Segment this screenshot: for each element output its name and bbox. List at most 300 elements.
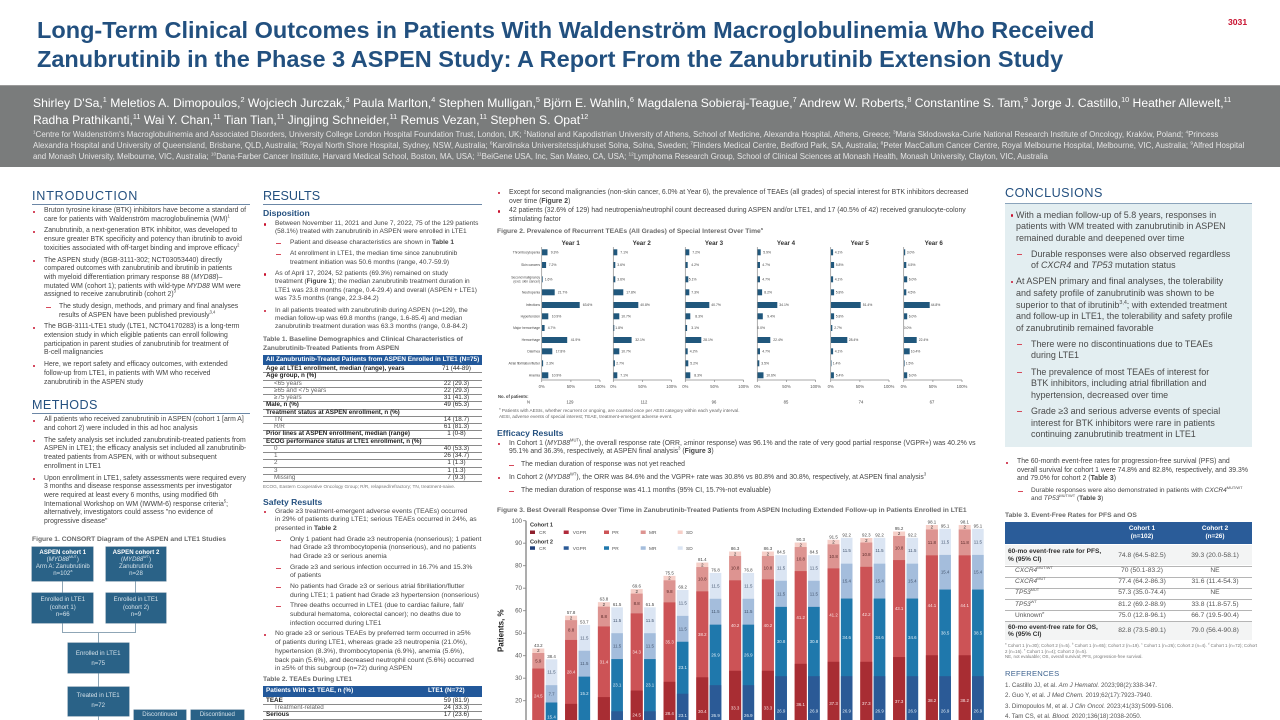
y axis: 90 — [515, 540, 523, 547]
segment labels cohort 1 PR and dark: 38.2 — [960, 698, 970, 703]
table 1 header — [263, 355, 482, 365]
panel: year 6: Year 6 — [925, 240, 943, 247]
segment labels cohort 2 SD and MR: 11.5 — [679, 600, 687, 606]
panel: year 4: 34.1% — [779, 303, 789, 307]
text: safety sub-bullet 3 — [290, 583, 479, 599]
segment labels cohort 2 PR and dark: 23.1 — [678, 713, 688, 718]
row labels: Atrial fibrillation/flutter — [508, 362, 541, 366]
box: ASPEN cohort 2: (MYD88WT) — [121, 555, 151, 563]
text: methods bullet 3: progressive disease" — [44, 518, 107, 525]
total labels: 98.1 — [928, 520, 937, 524]
caption: table 1: Table 1. Baseline Demographics and Clinical Characteristics of — [263, 336, 463, 343]
panel: year 6: 0.0% — [904, 326, 911, 330]
panel: year 2: 0% — [610, 384, 617, 389]
segment labels cohort 2 PR and dark: 26.9 — [875, 708, 884, 714]
table 1 rows: Age group, n (%) — [266, 372, 316, 379]
table 1 rows: Prior lines at ASPEN enrollment, median (range) — [266, 430, 410, 437]
text: methods bullet 3: International Workshop on WM (IWWM-6) response criteria5; — [44, 498, 228, 508]
table 2 header: Patients With ≥1 TEAE, n (%) — [266, 687, 353, 694]
table 1 rows: TN — [274, 416, 282, 423]
text: survival sub-bullet: Durable responses were also demonstrated in patients with CXCR4MUT/WT — [1031, 485, 1242, 494]
text: intro bullet 5 — [44, 360, 228, 386]
panel: year 4: Year 4 — [777, 240, 796, 247]
table 1 rows: 26 (34.7) — [444, 452, 469, 459]
text: methods bullet 2: enrollment in LTE1 — [44, 463, 101, 470]
text: conclusion 2 sub-bullet 2: BTK inhibitors, including atrial fibrillation and — [1031, 378, 1206, 388]
table 2: TEAEs during LTE1: TEAE — [266, 697, 283, 704]
authors — [33, 95, 1231, 127]
cohort 1 column header: Cohort 1 — [1129, 525, 1155, 532]
table 2 header: LTE1 (N=72) — [428, 687, 465, 694]
table 3: event-free rates: Unknowne — [1015, 610, 1044, 619]
table 1: baseline demographics — [263, 336, 482, 365]
box: enrolled cohort 1 — [32, 593, 93, 623]
text: intro bullet 4 — [44, 322, 239, 356]
text: efficacy bullet 1: In Cohort 1 (MYD88MUT), the overall response rate (ORR, ≥minor response) was 96.1% and the rate of very good partial response (VGPR+) was 40.2% vs — [509, 437, 976, 447]
stable disease count labels: 2 — [635, 589, 638, 594]
text: efficacy sub-bullet 1: The median duration of response was not yet reached — [521, 461, 685, 468]
box: treated in LTE1: Treated in LTE1 — [77, 692, 120, 699]
panel: year 4: 50% — [782, 384, 791, 389]
text: methods bullet 2: The safety analysis set included zanubrutinib-treated patients from — [44, 437, 246, 444]
text: disposition sub-bullet 2 — [290, 250, 457, 266]
affiliations — [33, 130, 1244, 161]
panel: year 4 — [754, 240, 821, 389]
segment labels cohort 1 PR and dark: 37.3 — [862, 701, 871, 706]
text: disposition bullet 3: median follow-up was 69.8 months (range, 1.6-85.4) and median — [275, 315, 462, 322]
segment labels cohort 1 PR and dark: 34.3 — [632, 650, 642, 654]
text: safety bullet 2: hypertension (8.3%), thrombocytopenia (6.9%), anemia (5.6%), — [275, 648, 464, 655]
panel: year 3: 100% — [738, 384, 749, 389]
row labels: Neutropenia — [522, 290, 540, 294]
text: survival summary — [1005, 458, 1252, 505]
panel: year 1: 10.9% — [552, 374, 561, 378]
panel: year 2 — [610, 240, 677, 389]
title: Zanubrutinib in the Phase 3 ASPEN Study: A Report From the Zanubrutinib Extension Study — [37, 46, 1063, 72]
y axis: 50 — [515, 630, 523, 637]
segment labels cohort 2 SD and MR: 11.5 — [908, 548, 917, 553]
title: Long-Term Clinical Outcomes in Patients With Waldenström Macroglobulinemia Who Received — [37, 17, 1094, 43]
table 1 rows: 22 (29.3) — [444, 380, 469, 386]
total labels: 38.4 — [547, 654, 556, 659]
table 1 rows: 1 (0-8) — [447, 430, 466, 437]
segment labels cohort 1 PR and dark: 38.2 — [698, 632, 707, 637]
segment labels cohort 1 PR and dark: 37.3 — [829, 701, 838, 706]
panel: efficacy results — [497, 428, 976, 494]
stable disease count labels: 2 — [767, 551, 770, 556]
text: methods bullet 3: were required at least every 6 months, using modified 6th — [44, 492, 218, 499]
y axis: 20 — [515, 698, 523, 705]
number of patients row: 74 — [859, 399, 864, 404]
panel: year 5: 2.7% — [834, 326, 842, 330]
affiliations: and Monash University, Melbourne, VIC, Australia; 10Dana-Farber Cancer Institute, Harvard Medical School, Boston, MA, USA; 11BeiGene USA, Inc, San Mateo, CA, USA; 12Lymphoma Research Group, School of Clinical Sciences at Monash Health, Monash University, Clayton, VIC, Australia — [33, 152, 1048, 161]
table 1 rows: R/R — [274, 423, 285, 430]
panel: year 1: 100% — [595, 384, 606, 389]
panel: year 1: 17.8% — [556, 350, 565, 354]
table 1 rows: 1 (1.3) — [447, 466, 466, 474]
panel: year 1: 4.7% — [548, 326, 555, 330]
segment labels cohort 1 MR: 10.8 — [829, 554, 838, 559]
panel: year 2: 2.7% — [616, 362, 624, 366]
table 3: event-free rates: CXCR4MUT — [1015, 576, 1046, 585]
segment labels cohort 2 PR and dark: 26.9 — [744, 652, 753, 657]
cohort 2 bars — [546, 529, 984, 720]
box: enrolled cohort 1: (cohort 1) — [50, 604, 76, 611]
cohort 2 column header — [1185, 525, 1245, 542]
text: methods bullet 3: Upon enrollment in LTE1, safety assessments were required every — [44, 475, 246, 482]
text: intro bullet 5: Here, we report safety and efficacy outcomes, with extended — [44, 361, 228, 368]
panel: year 6: 0% — [901, 384, 907, 389]
total labels: 61.5 — [646, 602, 655, 607]
conclusions background — [1005, 202, 1252, 447]
segment labels cohort 2 SD and MR: 11.5 — [613, 618, 622, 623]
panel: safety results — [263, 497, 482, 672]
segment labels cohort 2 PR and dark: 26.9 — [711, 652, 720, 657]
row labels: (excl. skin cancer) — [513, 280, 540, 284]
reference list: 4. Tam CS, et al. Blood. 2020;136(18):2038-2050. — [1005, 713, 1141, 720]
table 1 rows: 0 — [274, 445, 278, 452]
panel: year 2: 7.1% — [620, 374, 628, 378]
segment labels cohort 2 PR and dark: 34.6 — [842, 635, 852, 640]
panel: results — [263, 189, 482, 330]
panel: year 5: 5.4% — [836, 374, 843, 378]
segment labels cohort 1 PR and dark: 31.4 — [600, 659, 609, 664]
panel: year 1: 7.2% — [549, 263, 556, 267]
table 1 rows: ≥65 and <75 years — [274, 387, 326, 394]
total labels: 92.2 — [875, 532, 884, 537]
row labels — [1008, 548, 1108, 565]
panel: year 3: 8.3% — [694, 374, 702, 378]
text: disposition sub-bullet 1: Patient and disease characteristics are shown in Table 1 — [290, 239, 454, 246]
text: top bullet 2: stimulating factor — [509, 216, 561, 223]
panel: year 6: 1.5% — [906, 362, 913, 366]
segment labels cohort 2 PR and dark: 26.9 — [941, 708, 950, 714]
reference list: 3. Dimopoulos M, et al. J Clin Oncol. 2023;41(33):5099-5106. — [1005, 703, 1173, 710]
text: safety bullet 2: of patients during LTE1, whereas grade ≥3 neutropenia (21.0%), — [275, 639, 467, 646]
text: safety bullet 1 — [275, 508, 477, 532]
panel: references — [1005, 666, 1252, 720]
row labels — [508, 250, 541, 378]
panel: year 5: 5.8% — [836, 314, 843, 318]
row labels: Second malignancy — [511, 276, 540, 280]
panel: year 3: 28.1% — [703, 338, 713, 342]
segment labels cohort 2 SD and MR — [547, 539, 983, 696]
text: safety sub-bullet 3: No patients had Grade ≥3 or serious atrial fibrillation/flutter — [290, 583, 464, 590]
text: conclusion 1: With a median follow-up of 5.8 years, responses in — [1016, 210, 1216, 220]
reference list — [1005, 681, 1173, 720]
number of patients row: 129 — [566, 399, 574, 404]
text: safety sub-bullet 4: Three deaths occurred in LTE1 (due to cardiac failure, fall/ — [290, 602, 464, 609]
affiliations: Alexandra Hospital and University of Queensland, Brisbane, QLD, Australia; 5Royal North Shore Hospital, Sydney, NSW, Australia; 6Karolinska Universitetssjukhuset Solna, Solna, Sweden; 7Flinders Medical Centre, Bedford Park, SA, Australia; 8Peter MacCallum Cancer Centre, Royal Melbourne Hospital, Melbourne, VIC, Australia; 9Alfred Hospital — [33, 141, 1244, 150]
panel: year 5 — [828, 240, 895, 389]
segment labels cohort 2 PR and dark: 34.6 — [875, 635, 884, 640]
box: ASPEN cohort 1 — [32, 547, 93, 581]
cohort 1 values: 57.3 (35.0-74.4) — [1118, 589, 1166, 596]
panel: year 5: 28.4% — [849, 338, 858, 342]
text: disposition bullet 2: As of April 17, 2024, 52 patients (69.3%) remained on study — [275, 270, 448, 277]
total labels: 76.8 — [711, 567, 720, 572]
table 3 footnotes: 2 (n=16). e Cohort 1 (n=4); Cohort 2 (n=5). — [1005, 648, 1087, 654]
text: top bullet 1 — [509, 188, 968, 205]
panel: year 4: 3.5% — [761, 362, 769, 366]
box: discontinued 2 — [191, 710, 244, 720]
segment labels cohort 1 MR: 11.8 — [928, 540, 937, 545]
segment labels cohort 2 SD and MR: 11.5 — [843, 548, 851, 553]
segment labels cohort 2 SD and MR: 15.4 — [842, 579, 852, 584]
row labels: Infections — [526, 303, 540, 307]
text: safety bullet 2: back pain (5.6%), and decreased neutrophil count (5.6%) occurred — [275, 656, 474, 664]
box: discontinued 2: Discontinued — [200, 711, 235, 718]
row labels: Hemorrhage — [522, 338, 540, 342]
row labels: Thrombocytopenia — [513, 250, 540, 254]
box: enrolled cohort 2: Enrolled in LTE1 — [114, 596, 158, 603]
heading: introduction: INTRODUCTION — [32, 189, 138, 203]
caption: figure 1: Figure 1. CONSORT Diagram of the ASPEN and LTE1 Studies — [32, 536, 226, 543]
stable disease count labels: 2 — [734, 551, 737, 556]
legend — [530, 523, 693, 552]
stable disease count labels: 2 — [570, 615, 573, 620]
panel: year 6: 6.0% — [909, 278, 916, 282]
cohort 2 column header: Cohort 2 — [1202, 525, 1228, 532]
text: disposition bullet 2 — [275, 270, 477, 302]
row labels: Diarrhea — [527, 350, 540, 354]
text: intro bullet 5: follow-up from LTE1, in patients with WM who received — [44, 370, 210, 377]
text: conclusion 2 — [1016, 276, 1232, 334]
authors: Radha Prathikanti,11 Wai Y. Chan,11 Tian Tian,11 Jingjing Schneider,11 Remus Vezan,11 Stephen S. Opat12 — [33, 112, 588, 127]
number of patients row: 96 — [712, 399, 717, 404]
box: enrolled cohort 1: Enrolled in LTE1 — [40, 596, 85, 603]
text: safety sub-bullet 1: had Grade ≥3 or serious anemia — [290, 553, 387, 560]
segment labels cohort 2 PR and dark: 23.1 — [613, 683, 622, 688]
segment labels cohort 1 MR: 8.8 — [634, 601, 640, 606]
box: treated in LTE1: n=72 — [91, 702, 105, 709]
text: top bullet 2 — [509, 206, 966, 223]
cohort 2 values: NE — [1210, 589, 1220, 596]
legend: PR — [612, 530, 619, 536]
table 3: event-free rates — [1005, 512, 1252, 642]
segment labels cohort 2 SD and MR: 11.5 — [711, 583, 720, 588]
row labels: % (95% CI) — [1008, 556, 1041, 563]
total labels: 63.8 — [600, 597, 609, 602]
box: enrolled cohort 2: (cohort 2) — [123, 604, 149, 611]
box: ASPEN cohort 2: ASPEN cohort 2 — [113, 549, 159, 556]
box: enrolled in LTE1: n=75 — [91, 660, 105, 666]
segment labels cohort 2 PR and dark: 23.1 — [646, 683, 655, 688]
segment labels cohort 1 PR and dark: 24.5 — [632, 712, 642, 718]
table 3 footnotes: a Cohort 1 (n=30); Cohort 2 (n=5). b Cohort 1 (n=65); Cohort 2 (n=19). c Cohort 1 (n=26); Cohort 2 (n=4). d Cohort 1 (n=72); Cohort — [1005, 643, 1257, 648]
panel: year 5: 1.4% — [833, 362, 840, 366]
cohort 1 bars — [532, 525, 971, 720]
text: disposition bullet 1 — [275, 220, 478, 235]
segment labels cohort 2 SD and MR: 11.5 — [941, 539, 950, 544]
text: disposition bullet 3 — [275, 306, 468, 330]
text: top bullet 1: Except for second malignancies (non-skin cancer, 6.0% at Year 6), the prevalence of TEAEs (all grades) of special interest for BTK inhibitors decreased — [509, 189, 968, 196]
text: safety bullet 2: No grade ≥3 or serious TEAEs by preferred term occurred in ≥5% — [275, 630, 471, 637]
text: intro sub-bullet: results of ASPEN have been published previously3,4 — [59, 309, 215, 319]
segment labels cohort 2 PR and dark: 15.2 — [580, 691, 589, 696]
total labels: 69.2 — [678, 584, 688, 590]
table 1 rows: 2 — [274, 459, 278, 466]
cohort 1 values: 75.0 (12.8-96.1) — [1118, 612, 1166, 619]
text: intro sub-bullet: The study design, methods, and primary and final analyses — [59, 303, 238, 310]
row labels: Hypertension — [521, 314, 540, 318]
panel: year 1: 41.9% — [571, 338, 580, 342]
panel: year 4: 4.7% — [762, 263, 770, 267]
text: intro bullet 3 — [44, 256, 241, 298]
text: intro bullet 3: The ASPEN study (BGB-3111-302; NCT03053440) directly — [44, 257, 222, 264]
table 1 rows: Treatment status at ASPEN enrollment, n (%) — [266, 408, 400, 416]
segment labels cohort 2 PR and dark: 26.9 — [842, 708, 852, 714]
text: disposition sub-bullet 2: treatment initiation was 50.6 months (range, 40.7-59.9) — [290, 259, 449, 266]
table 2: TEAEs during LTE1: 59 (81.9) — [444, 697, 469, 704]
segment labels cohort 2 PR and dark: 30.8 — [777, 639, 786, 644]
panel: year 3: 40.7% — [711, 303, 721, 307]
table 3: event-free rates: 60-mo event-free rate for OS, — [1008, 624, 1098, 630]
panel: year 3: 8.3% — [695, 314, 703, 318]
legend: SD — [686, 546, 693, 552]
text: methods bullet 1: and cohort 2) were included in this ad hoc analysis — [44, 425, 198, 432]
caption: table 2: Table 2. TEAEs During LTE1 — [263, 676, 352, 683]
cohort 1 values: 70 (50.1-83.2) — [1121, 567, 1163, 574]
panel: year 2: Year 2 — [633, 240, 651, 247]
text: safety sub-bullet 4: subdural hematoma, colorectal cancer); no deaths due to — [290, 611, 461, 618]
text: survival bullet — [1017, 458, 1248, 483]
segment labels cohort 1 PR and dark: 38.2 — [928, 698, 937, 703]
text: survival sub-bullet — [1031, 487, 1242, 503]
panel: year 3 — [682, 240, 749, 389]
text: safety sub-bullet 2 — [290, 564, 472, 579]
segment labels cohort 2 SD and MR: 11.5 — [580, 635, 589, 640]
row labels: 60-mo event-free rate for PFS, — [1008, 548, 1101, 555]
y axis: 70 — [515, 585, 523, 592]
row labels: Anemia — [529, 374, 540, 378]
panel: year 3: Year 3 — [705, 240, 724, 247]
stable disease count labels: 2 — [865, 538, 868, 543]
text: intro bullet 2 — [44, 226, 242, 252]
cohort 2 values: 79.0 (56.4-90.8) — [1191, 627, 1239, 634]
table 1 rows: ≥75 years — [274, 394, 302, 401]
table 1 rows: 3 — [274, 466, 278, 474]
cohort 1 values — [1112, 512, 1172, 637]
text: methods bullet 2: treated patients from ASPEN, with or without subsequent — [44, 454, 217, 461]
panel: year 3: 0% — [682, 384, 689, 389]
text: safety sub-bullet 2: of patients — [290, 572, 321, 579]
segment labels cohort 1 PR and dark: 44.1 — [928, 603, 937, 608]
panel: year 1: 9.3% — [551, 250, 558, 254]
text: conclusion 1: patients with WM treated with zanubrutinib in ASPEN — [1016, 221, 1226, 231]
text: safety bullet 1: in 29% of patients during LTE1; serious TEAEs occurred in 24%, as — [275, 516, 477, 523]
panel: year 4: 8.2% — [764, 290, 772, 294]
text: intro bullet 4: The BGB-3111-LTE1 study (LTE1, NCT04170283) is a long-term — [44, 323, 239, 330]
text: safety bullet 1: Grade ≥3 treatment-emergent adverse events (TEAEs) occurred — [275, 508, 467, 515]
text: disposition sub-bullet 2: At enrollment in LTE1, the median time since zanubrutinib — [290, 250, 457, 257]
segment labels cohort 1 MR: 10.8 — [764, 566, 773, 571]
total labels: 84.5 — [777, 550, 786, 555]
total labels: 84.5 — [810, 550, 819, 555]
segment labels cohort 2 SD and MR: 11.5 — [679, 626, 687, 631]
panel: year 4: 0.0% — [757, 326, 765, 330]
y axis: 30 — [515, 675, 523, 682]
box: enrolled cohort 1: n=66 — [56, 611, 70, 618]
row background PFS — [1005, 545, 1252, 565]
table 3: event-free rates: CXCR4MUT/WT — [1015, 565, 1053, 574]
box: ASPEN cohort 2: n=28 — [129, 570, 143, 577]
segment labels cohort 1 MR: 10.8 — [862, 552, 871, 557]
text: methods bullet 1: All patients who received zanubrutinib in ASPEN (cohort 1 [arm A] — [44, 416, 244, 423]
panel: year 5: 4.1% — [835, 250, 842, 254]
total labels: 92.3 — [862, 532, 871, 538]
text: top bullet 2: 42 patients (32.6% of 129) had neutropenia/neutrophil count decreased during ASPEN and/or LTE1, and 17 (40.5% of 42) received granulocyte-colony — [509, 207, 966, 214]
panel: year 5: 100% — [884, 384, 895, 389]
box: treated in LTE1 — [68, 687, 129, 716]
text: survival sub-bullet: and TP53MUT/WT (Table 3) — [1031, 493, 1103, 502]
text: efficacy sub-bullet 2: The median duration of response was 41.1 months (95% CI, 15.7%-not evaluable) — [521, 487, 771, 494]
text: intro bullet 3: with myeloid differentiation primary response 88 (MYD88)– — [44, 274, 222, 281]
legend: CR — [539, 530, 546, 536]
text: intro sub-bullet — [59, 302, 238, 319]
panel: year 2: 10.7% — [621, 350, 631, 354]
segment labels cohort 2 SD and MR: 7.7 — [548, 691, 555, 696]
legend: VGPR — [573, 530, 587, 536]
segment labels cohort 2 SD and MR: 11.5 — [974, 539, 983, 544]
table 3 header — [1005, 522, 1252, 544]
text: disposition bullet 2: was 73.5 months (range, 22.3-84.2) — [275, 295, 379, 302]
segment labels cohort 2 SD and MR: 11.5 — [711, 609, 720, 614]
cohort 2 column header: (n=26) — [1205, 533, 1224, 540]
total labels: 75.5 — [665, 570, 674, 575]
panel: year 1 — [539, 240, 606, 389]
table 3: event-free rates: TP53MUT — [1015, 587, 1039, 596]
legend: CR — [539, 546, 546, 552]
panel: year 5: 4.1% — [835, 350, 842, 354]
segment labels cohort 1 PR and dark: 40.2 — [731, 623, 740, 628]
total labels: 86.3 — [764, 546, 773, 551]
heading: conclusions: CONCLUSIONS — [1005, 186, 1103, 200]
legend: SD — [686, 530, 693, 536]
text: safety sub-bullet 1: Only 1 patient had Grade ≥3 neutropenia (nonserious); 1 patient — [290, 536, 481, 543]
cohort 2 values: 31.6 (11.4-54.3) — [1191, 578, 1239, 585]
panel: year 2: 17.8% — [626, 290, 636, 294]
panel: year 4: 5.9% — [763, 250, 771, 254]
panel: methods — [32, 398, 250, 525]
panel: year 6: 22.4% — [919, 338, 928, 342]
panel: year 5: 0% — [828, 384, 834, 389]
segment labels cohort 2 PR and dark: 34.6 — [908, 635, 917, 640]
segment labels cohort 2 SD and MR: 11.5 — [777, 566, 786, 570]
table 3 footnotes — [1005, 643, 1257, 660]
panel: year 1: 10.9% — [552, 314, 561, 318]
text: methods bullet 2: ASPEN in LTE1; the efficacy analysis set included all zanubrutinib- — [44, 445, 246, 452]
author band — [0, 85, 1280, 167]
box: enrolled cohort 2: n=9 — [131, 611, 141, 618]
panel: year 4: 4.7% — [762, 278, 770, 282]
number of patients row: 85 — [784, 399, 789, 404]
text: safety sub-bullet 1 — [290, 536, 482, 560]
stable disease count labels: 2 — [963, 525, 966, 530]
row background OS — [1005, 621, 1252, 640]
segment labels cohort 2 PR and dark: 15.4 — [547, 714, 556, 720]
y axis: Patients, % — [496, 609, 506, 652]
segment labels cohort 1 MR: 8.8 — [568, 628, 575, 632]
cohort 1 values: 81.2 (69.2-88.9) — [1118, 601, 1166, 608]
segment labels cohort 1 PR and dark: 28.4 — [567, 669, 576, 674]
caption: table 3: Table 3. Event-Free Rates for PFS and OS — [1005, 512, 1137, 519]
text: intro bullet 5: zanubrutinib in the ASPEN study — [44, 379, 143, 386]
text: intro bullet 2: toxicities associated with off-target binding and improve efficacy2 — [44, 242, 239, 252]
text: intro bullet 4: participation in parent studies of zanubrutinib for treatment of — [44, 341, 229, 348]
cohort 1 values: 82.8 (73.5-89.1) — [1118, 627, 1166, 634]
panel: year 2: 100% — [666, 384, 677, 389]
